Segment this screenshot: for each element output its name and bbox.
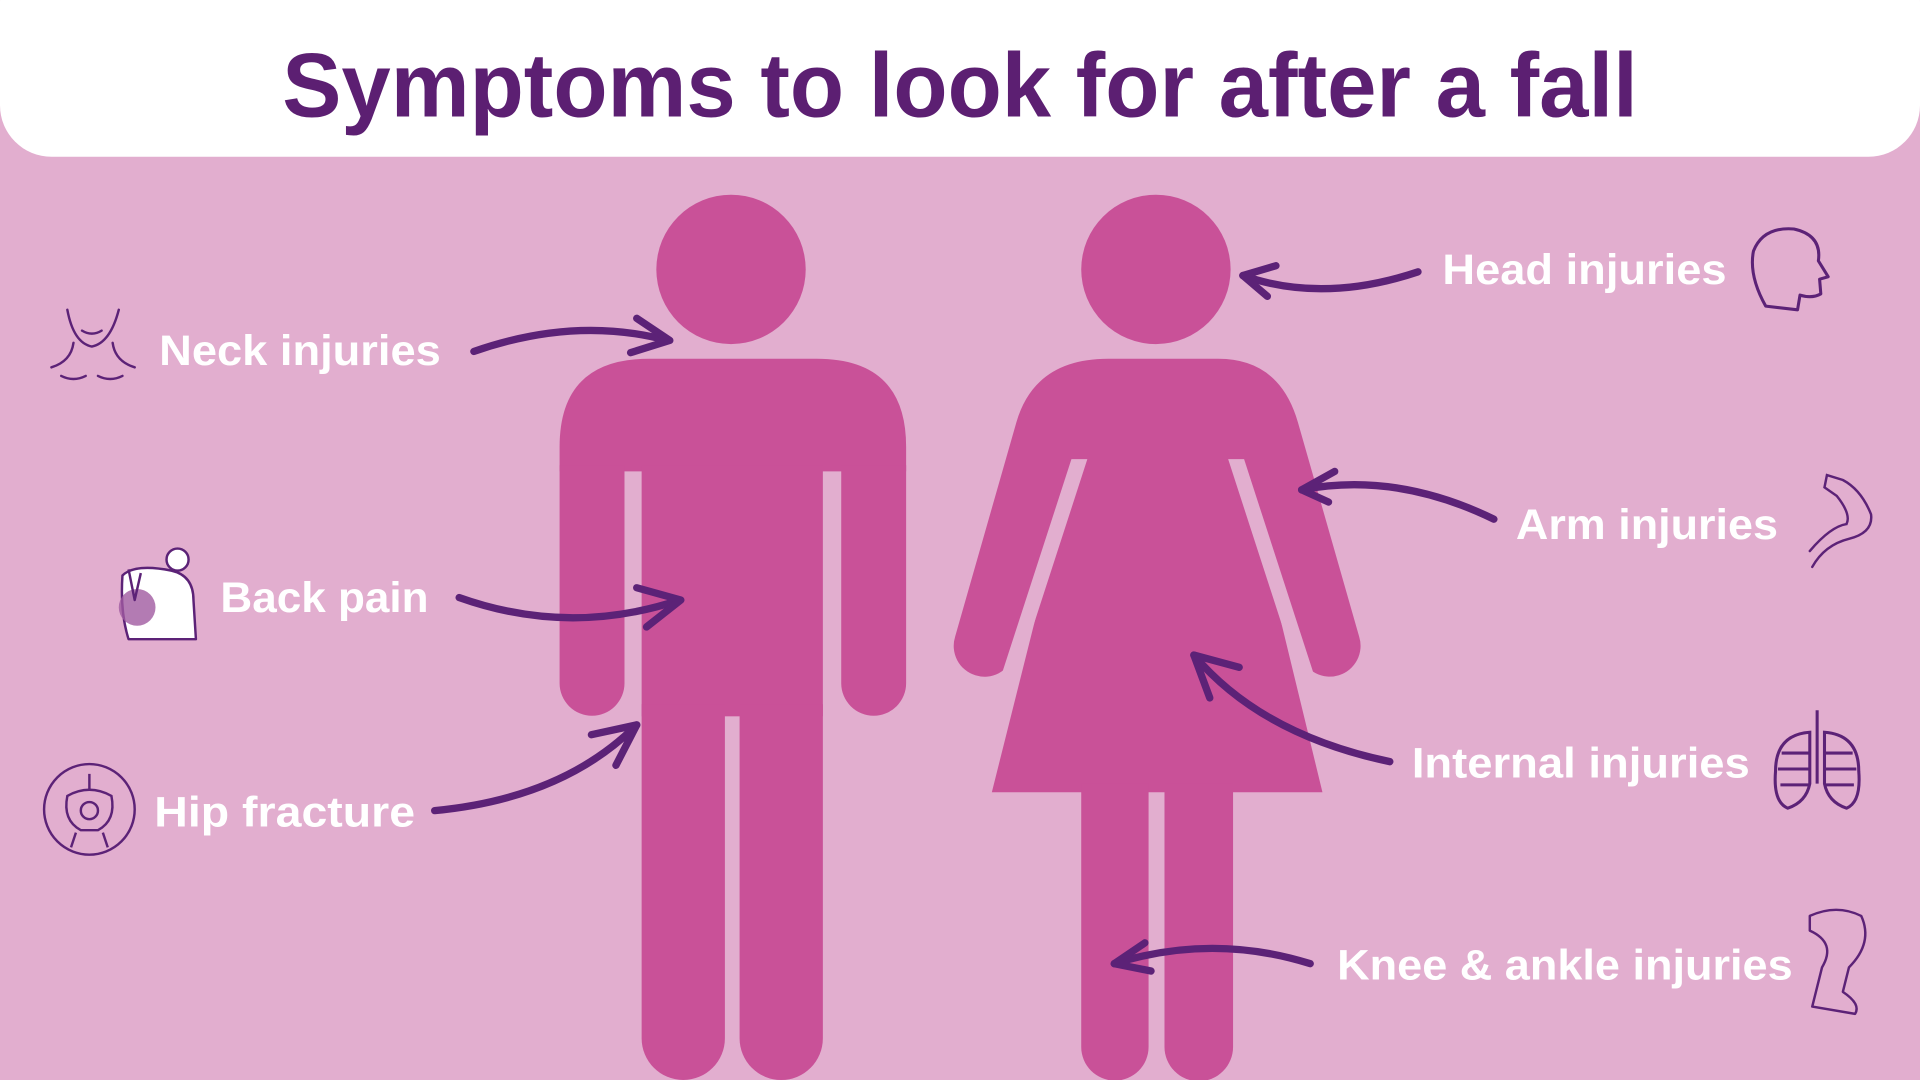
icon: arm [1810,475,1871,567]
icon: back pain [119,549,196,639]
title: Symptoms to look for after a fall [282,35,1638,136]
labels [154,246,1793,990]
icon: hip [44,764,135,855]
arrow: head [1243,266,1418,296]
figure: man [560,195,906,1080]
label: neck: Neck injuries [159,327,441,375]
arrow: internal [1194,655,1390,762]
label: internal: Internal injuries [1412,740,1750,788]
label: hip: Hip fracture [154,789,415,837]
label: head: Head injuries [1442,246,1727,294]
icon: leg [1810,910,1865,1014]
arrow: arm [1302,471,1494,519]
label: back: Back pain [220,574,429,622]
title bar [0,0,1920,157]
icon: head [1752,229,1828,310]
arrow: back [459,588,681,627]
label: arm: Arm injuries [1516,501,1778,549]
figure: woman [954,195,1361,1080]
icon: lungs [1775,710,1859,808]
arrow: neck [474,318,670,353]
arrow: knee [1114,943,1310,971]
label: knee: Knee & ankle injuries [1337,942,1793,990]
icon: neck [51,310,135,379]
arrow: hip [435,725,637,811]
